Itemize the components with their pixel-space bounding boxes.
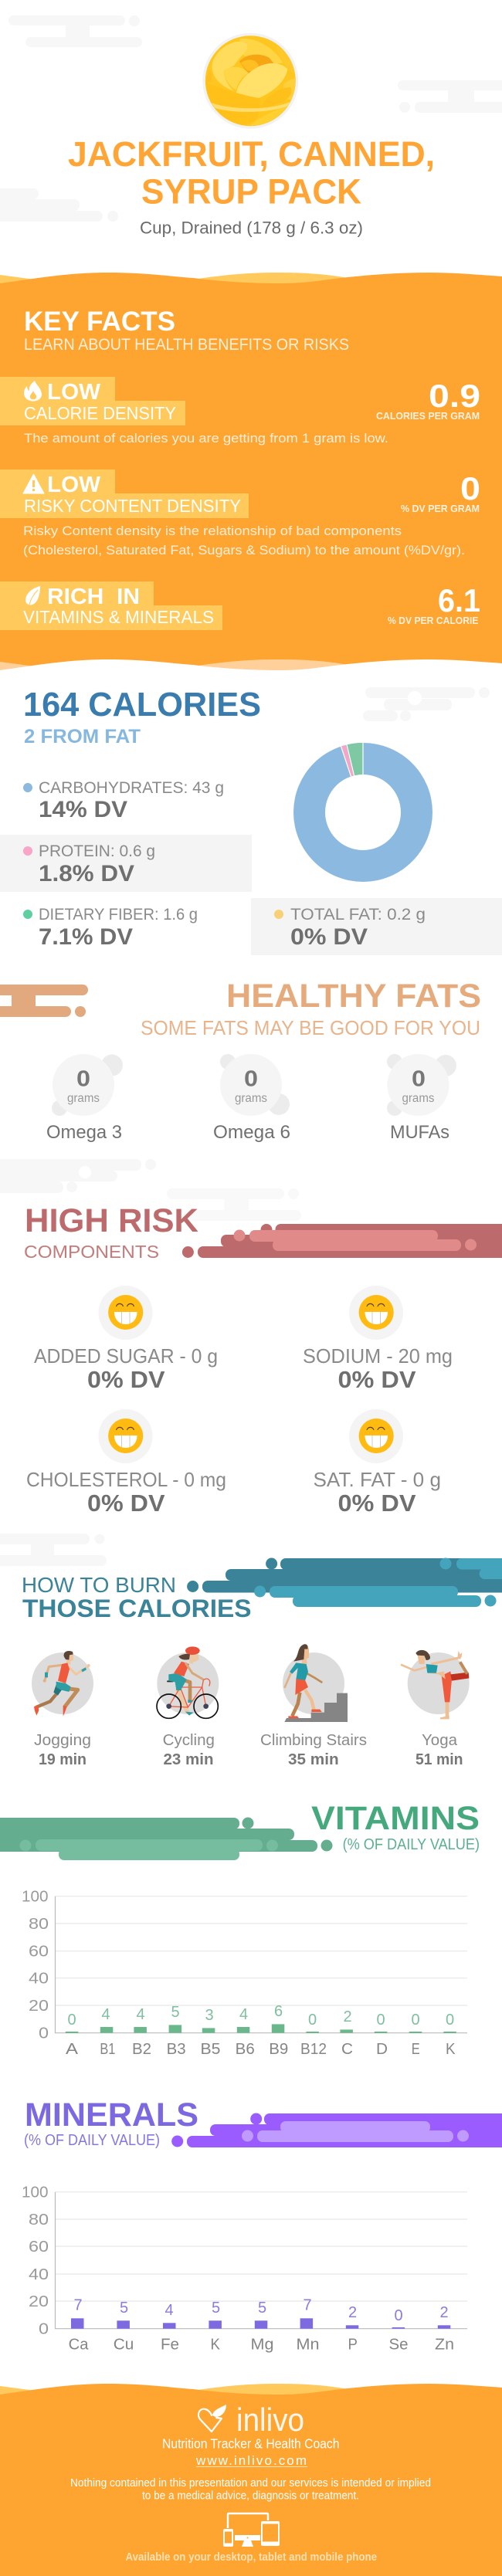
bar chart: vitamins: 40 xyxy=(29,1971,49,1988)
activity: yoga: Yoga xyxy=(422,1732,458,1749)
macro: dietary fiber: DIETARY FIBER: 1.6 g xyxy=(39,906,198,924)
fact: low calorie density xyxy=(0,377,480,446)
key facts heading: LEARN ABOUT HEALTH BENEFITS OR RISKS xyxy=(24,336,349,354)
cloud banner: burn xyxy=(187,1558,502,1607)
bar chart: minerals: 5 xyxy=(120,2300,128,2317)
macro: carbohydrates: CARBOHYDRATES: 43 g xyxy=(39,779,224,797)
bar chart: vitamins: 3 xyxy=(205,2007,214,2024)
panel: high risk components xyxy=(24,1202,502,1517)
fact: rich in vitamins and minerals: VITAMINS & MINERALS xyxy=(23,607,214,627)
fat: MUFAs: 0 xyxy=(412,1067,426,1092)
fact: low calorie density: CALORIES PER GRAM xyxy=(376,410,480,422)
bar chart: minerals: 20 xyxy=(29,2293,49,2310)
minerals heading: (% OF DAILY VALUE) xyxy=(24,2132,160,2149)
panel: vitamins xyxy=(0,1800,480,2058)
macro: carbohydrates: 14% DV xyxy=(39,797,127,822)
icon: flame xyxy=(24,381,42,402)
fact: low risky content density: 0 xyxy=(460,470,480,507)
bar chart: vitamins: 6 xyxy=(274,2003,283,2020)
bar chart: vitamins: 4 xyxy=(136,2006,145,2023)
component: added sugar: 0% DV xyxy=(87,1366,165,1393)
bar chart: vitamins: 2 xyxy=(343,2008,352,2025)
logo: inlivo: inlivo xyxy=(236,2401,304,2438)
macro: protein xyxy=(23,842,155,886)
fact: rich in vitamins and minerals xyxy=(0,581,480,630)
bar chart: vitamins: 4 xyxy=(101,2006,110,2023)
bar chart: minerals: Ca xyxy=(69,2337,89,2354)
bar chart: vitamins: 60 xyxy=(29,1944,49,1961)
bar chart: minerals: 0 xyxy=(394,2307,403,2324)
title: SYRUP PACK xyxy=(141,171,361,212)
food photo: canned fruit in bowl xyxy=(202,33,298,129)
bar chart: vitamins: B12 xyxy=(300,2041,327,2058)
bar chart: vitamins: 0 xyxy=(308,2012,317,2029)
bar chart: minerals: Fe xyxy=(161,2337,179,2354)
bar chart: vitamins: 4 xyxy=(239,2006,248,2023)
bar chart: minerals: Se xyxy=(389,2337,408,2354)
high risk heading xyxy=(24,1202,198,1262)
burn heading: HOW TO BURN xyxy=(22,1573,176,1597)
bar chart: minerals: 80 xyxy=(29,2212,49,2229)
fact: low calorie density: The amount of calories you are getting from 1 gram is low. xyxy=(24,432,388,446)
bar chart: minerals: 40 xyxy=(29,2266,49,2283)
icon: cyclist xyxy=(157,1646,219,1718)
bar chart: vitamins: A xyxy=(66,2041,79,2058)
bar chart: minerals: P xyxy=(348,2337,358,2354)
bar chart: vitamins: 100 xyxy=(22,1889,48,1906)
fact: rich in vitamins and minerals: 6.1 xyxy=(438,582,480,619)
macro: total fat: TOTAL FAT: 0.2 g xyxy=(290,906,426,924)
calories heading xyxy=(23,686,261,747)
bar chart: minerals: 4 xyxy=(165,2302,174,2319)
bar chart: vitamins: K xyxy=(446,2041,456,2058)
donut chart xyxy=(293,743,432,882)
fat: MUFAs: MUFAs xyxy=(390,1122,449,1143)
activity: climbing stairs: 35 min xyxy=(288,1751,339,1768)
icon: leaf xyxy=(25,586,40,605)
serving size subtitle: Cup, Drained (178 g / 6.3 oz) xyxy=(140,219,363,238)
high risk heading: COMPONENTS xyxy=(24,1242,159,1262)
bar chart: vitamins: B6 xyxy=(236,2041,255,2058)
bar chart: minerals: 2 xyxy=(439,2304,449,2321)
fact: low calorie density: CALORIE DENSITY xyxy=(24,403,176,423)
cloud banner: minerals xyxy=(171,2113,502,2147)
vitamins heading xyxy=(311,1800,480,1853)
title: JACKFRUIT, CANNED, xyxy=(68,134,435,174)
bar chart: minerals: 5 xyxy=(212,2300,220,2317)
activity: yoga xyxy=(401,1650,470,1768)
component: sodium: 0% DV xyxy=(338,1366,416,1393)
key facts heading xyxy=(24,307,349,354)
cloud banner: healthy fats xyxy=(0,985,88,1017)
logo: inlivo xyxy=(198,2401,304,2438)
fact: low risky content density: % DV PER GRAM xyxy=(401,503,480,514)
calories heading: 164 CALORIES xyxy=(23,686,261,724)
healthy fats heading: HEALTHY FATS xyxy=(226,978,481,1015)
bar chart: minerals: 60 xyxy=(29,2239,49,2256)
fact: low calorie density: 0.9 xyxy=(429,378,480,414)
icon: stair climber xyxy=(283,1644,348,1722)
bar chart: vitamins: B3 xyxy=(167,2041,186,2058)
bar chart: minerals: 2 xyxy=(348,2304,357,2321)
icon: warning triangle xyxy=(23,474,44,493)
bar chart: minerals: 7 xyxy=(303,2297,312,2314)
bar chart: minerals: 100 xyxy=(22,2185,48,2201)
fat: MUFAs: grams xyxy=(402,1092,435,1105)
bar chart: vitamins: B9 xyxy=(269,2041,288,2058)
fat: omega 3: Omega 3 xyxy=(46,1122,122,1143)
minerals heading: MINERALS xyxy=(25,2096,198,2134)
component: sodium: SODIUM - 20 mg xyxy=(303,1344,453,1368)
activity: cycling: Cycling xyxy=(163,1732,215,1749)
fact: low calorie density: LOW xyxy=(47,380,101,405)
bar chart: minerals: Cu xyxy=(114,2337,134,2354)
icon: jogger xyxy=(32,1651,93,1717)
background clouds: header xyxy=(0,15,502,222)
bar chart: vitamins: 0 xyxy=(67,2012,76,2029)
activity: cycling: 23 min xyxy=(164,1751,213,1768)
panel: footer xyxy=(0,2384,502,2576)
panel: healthy fats xyxy=(0,978,481,1143)
bar chart: vitamins: 0 xyxy=(376,2012,385,2029)
title xyxy=(68,134,435,212)
panel: minerals xyxy=(22,2096,502,2354)
bar chart: minerals: Mn xyxy=(297,2337,320,2354)
bar chart: vitamins: 5 xyxy=(171,2004,180,2021)
component: saturated fat xyxy=(314,1409,441,1517)
fat: omega 3 xyxy=(46,1054,123,1143)
fact: rich in vitamins and minerals: RICH IN xyxy=(47,585,140,609)
bar chart: vitamins: 0 xyxy=(39,2025,49,2042)
panel: key facts xyxy=(0,273,502,680)
cloud banner: vitamins xyxy=(0,1818,332,1860)
bar chart: vitamins: 20 xyxy=(29,1998,49,2015)
key facts heading: KEY FACTS xyxy=(24,307,175,337)
component: cholesterol: 0% DV xyxy=(87,1490,165,1517)
bar chart: minerals: Mg xyxy=(250,2337,273,2354)
activity: climbing stairs: Climbing Stairs xyxy=(260,1732,367,1749)
icon: yoga pose xyxy=(401,1650,470,1719)
bar chart: minerals: 5 xyxy=(258,2300,266,2317)
bar chart: minerals: Zn xyxy=(435,2337,454,2354)
bar chart: vitamins: C xyxy=(341,2041,353,2058)
macro: dietary fiber: 7.1% DV xyxy=(39,924,133,950)
website link: www.inlivo.com xyxy=(195,2453,307,2468)
bar chart: vitamins: B2 xyxy=(132,2041,151,2058)
fat: omega 3: grams xyxy=(67,1092,100,1105)
activity: cycling xyxy=(157,1646,219,1768)
bar chart: vitamins: 80 xyxy=(29,1916,49,1933)
component: added sugar: ADDED SUGAR - 0 g xyxy=(34,1344,218,1368)
macro: total fat: 0% DV xyxy=(290,924,368,950)
disclaimer xyxy=(70,2476,431,2503)
component: sodium xyxy=(303,1286,453,1393)
component: added sugar xyxy=(34,1286,218,1393)
activity: jogging xyxy=(32,1651,93,1768)
vitamins heading: VITAMINS xyxy=(311,1800,480,1837)
bar chart: vitamins xyxy=(22,1889,467,2058)
bar chart: vitamins: B5 xyxy=(201,2041,221,2058)
macro: dietary fiber xyxy=(23,906,198,950)
panel: how to burn those calories xyxy=(22,1558,502,1768)
bar chart: minerals xyxy=(22,2185,467,2354)
activity: jogging: 19 min xyxy=(39,1751,86,1768)
macro: protein: 1.8% DV xyxy=(39,861,134,886)
fat: omega 6: grams xyxy=(235,1092,267,1105)
availability note: Available on your desktop, tablet and mobile phone xyxy=(125,2551,377,2564)
bar chart: vitamins: 0 xyxy=(446,2012,454,2029)
fact: low risky content density: Risky Content density is the relationship of bad components xyxy=(23,524,402,538)
healthy fats heading: SOME FATS MAY BE GOOD FOR YOU xyxy=(141,1016,480,1039)
bar chart: vitamins: E xyxy=(412,2041,420,2058)
bar chart: vitamins: 0 xyxy=(411,2012,420,2029)
component: cholesterol xyxy=(26,1409,226,1517)
fact: low risky content density xyxy=(0,469,480,558)
panel: calories xyxy=(0,686,502,955)
macro: total fat xyxy=(274,906,426,950)
macro: carbohydrates xyxy=(23,779,224,822)
disclaimer: to be a medical advice, diagnosis or treatment. xyxy=(142,2490,359,2503)
component: saturated fat: SAT. FAT - 0 g xyxy=(314,1468,441,1491)
component: cholesterol: CHOLESTEROL - 0 mg xyxy=(26,1468,226,1491)
macro: protein: PROTEIN: 0.6 g xyxy=(39,842,155,860)
fat: omega 6: 0 xyxy=(244,1067,258,1092)
tagline: Nutrition Tracker & Health Coach xyxy=(162,2436,340,2452)
component: saturated fat: 0% DV xyxy=(338,1490,416,1517)
fact: low risky content density: LOW xyxy=(47,473,101,497)
burn heading: THOSE CALORIES xyxy=(22,1595,252,1622)
fact: low risky content density: RISKY CONTENT DENSITY xyxy=(24,496,241,516)
high risk heading: HIGH RISK xyxy=(25,1202,198,1239)
bar chart: vitamins: D xyxy=(376,2041,388,2058)
disclaimer: Nothing contained in this presentation and our services is intended or implied xyxy=(70,2476,431,2490)
calories heading: 2 FROM FAT xyxy=(24,726,141,747)
fact: rich in vitamins and minerals: % DV PER CALORIE xyxy=(388,615,479,626)
fat: omega 6: Omega 6 xyxy=(213,1122,290,1143)
bar chart: vitamins: B1 xyxy=(100,2041,115,2058)
activity: climbing stairs xyxy=(260,1644,367,1768)
fat: omega 6 xyxy=(213,1054,290,1143)
background cloud: calories xyxy=(363,687,490,721)
background clouds: high risk xyxy=(0,1159,301,1221)
activity: yoga: 51 min xyxy=(416,1751,463,1768)
bar chart: minerals: 7 xyxy=(73,2297,83,2314)
bar chart: minerals: 0 xyxy=(39,2321,49,2338)
burn heading xyxy=(22,1573,252,1622)
cloud banner: high risk xyxy=(182,1224,502,1258)
fact: low risky content density: (Cholesterol, Saturated Fat, Sugars & Sodium) to the amount (%DV/gr). xyxy=(23,544,465,558)
vitamins heading: (% OF DAILY VALUE) xyxy=(343,1836,480,1853)
fat: omega 3: 0 xyxy=(76,1067,90,1092)
fat: MUFAs xyxy=(387,1054,456,1143)
icon: devices xyxy=(223,2513,280,2547)
bar chart: minerals: K xyxy=(210,2337,221,2354)
activity: jogging: Jogging xyxy=(34,1732,91,1749)
background cloud: burn calories xyxy=(0,1534,107,1566)
healthy fats heading xyxy=(141,978,481,1039)
